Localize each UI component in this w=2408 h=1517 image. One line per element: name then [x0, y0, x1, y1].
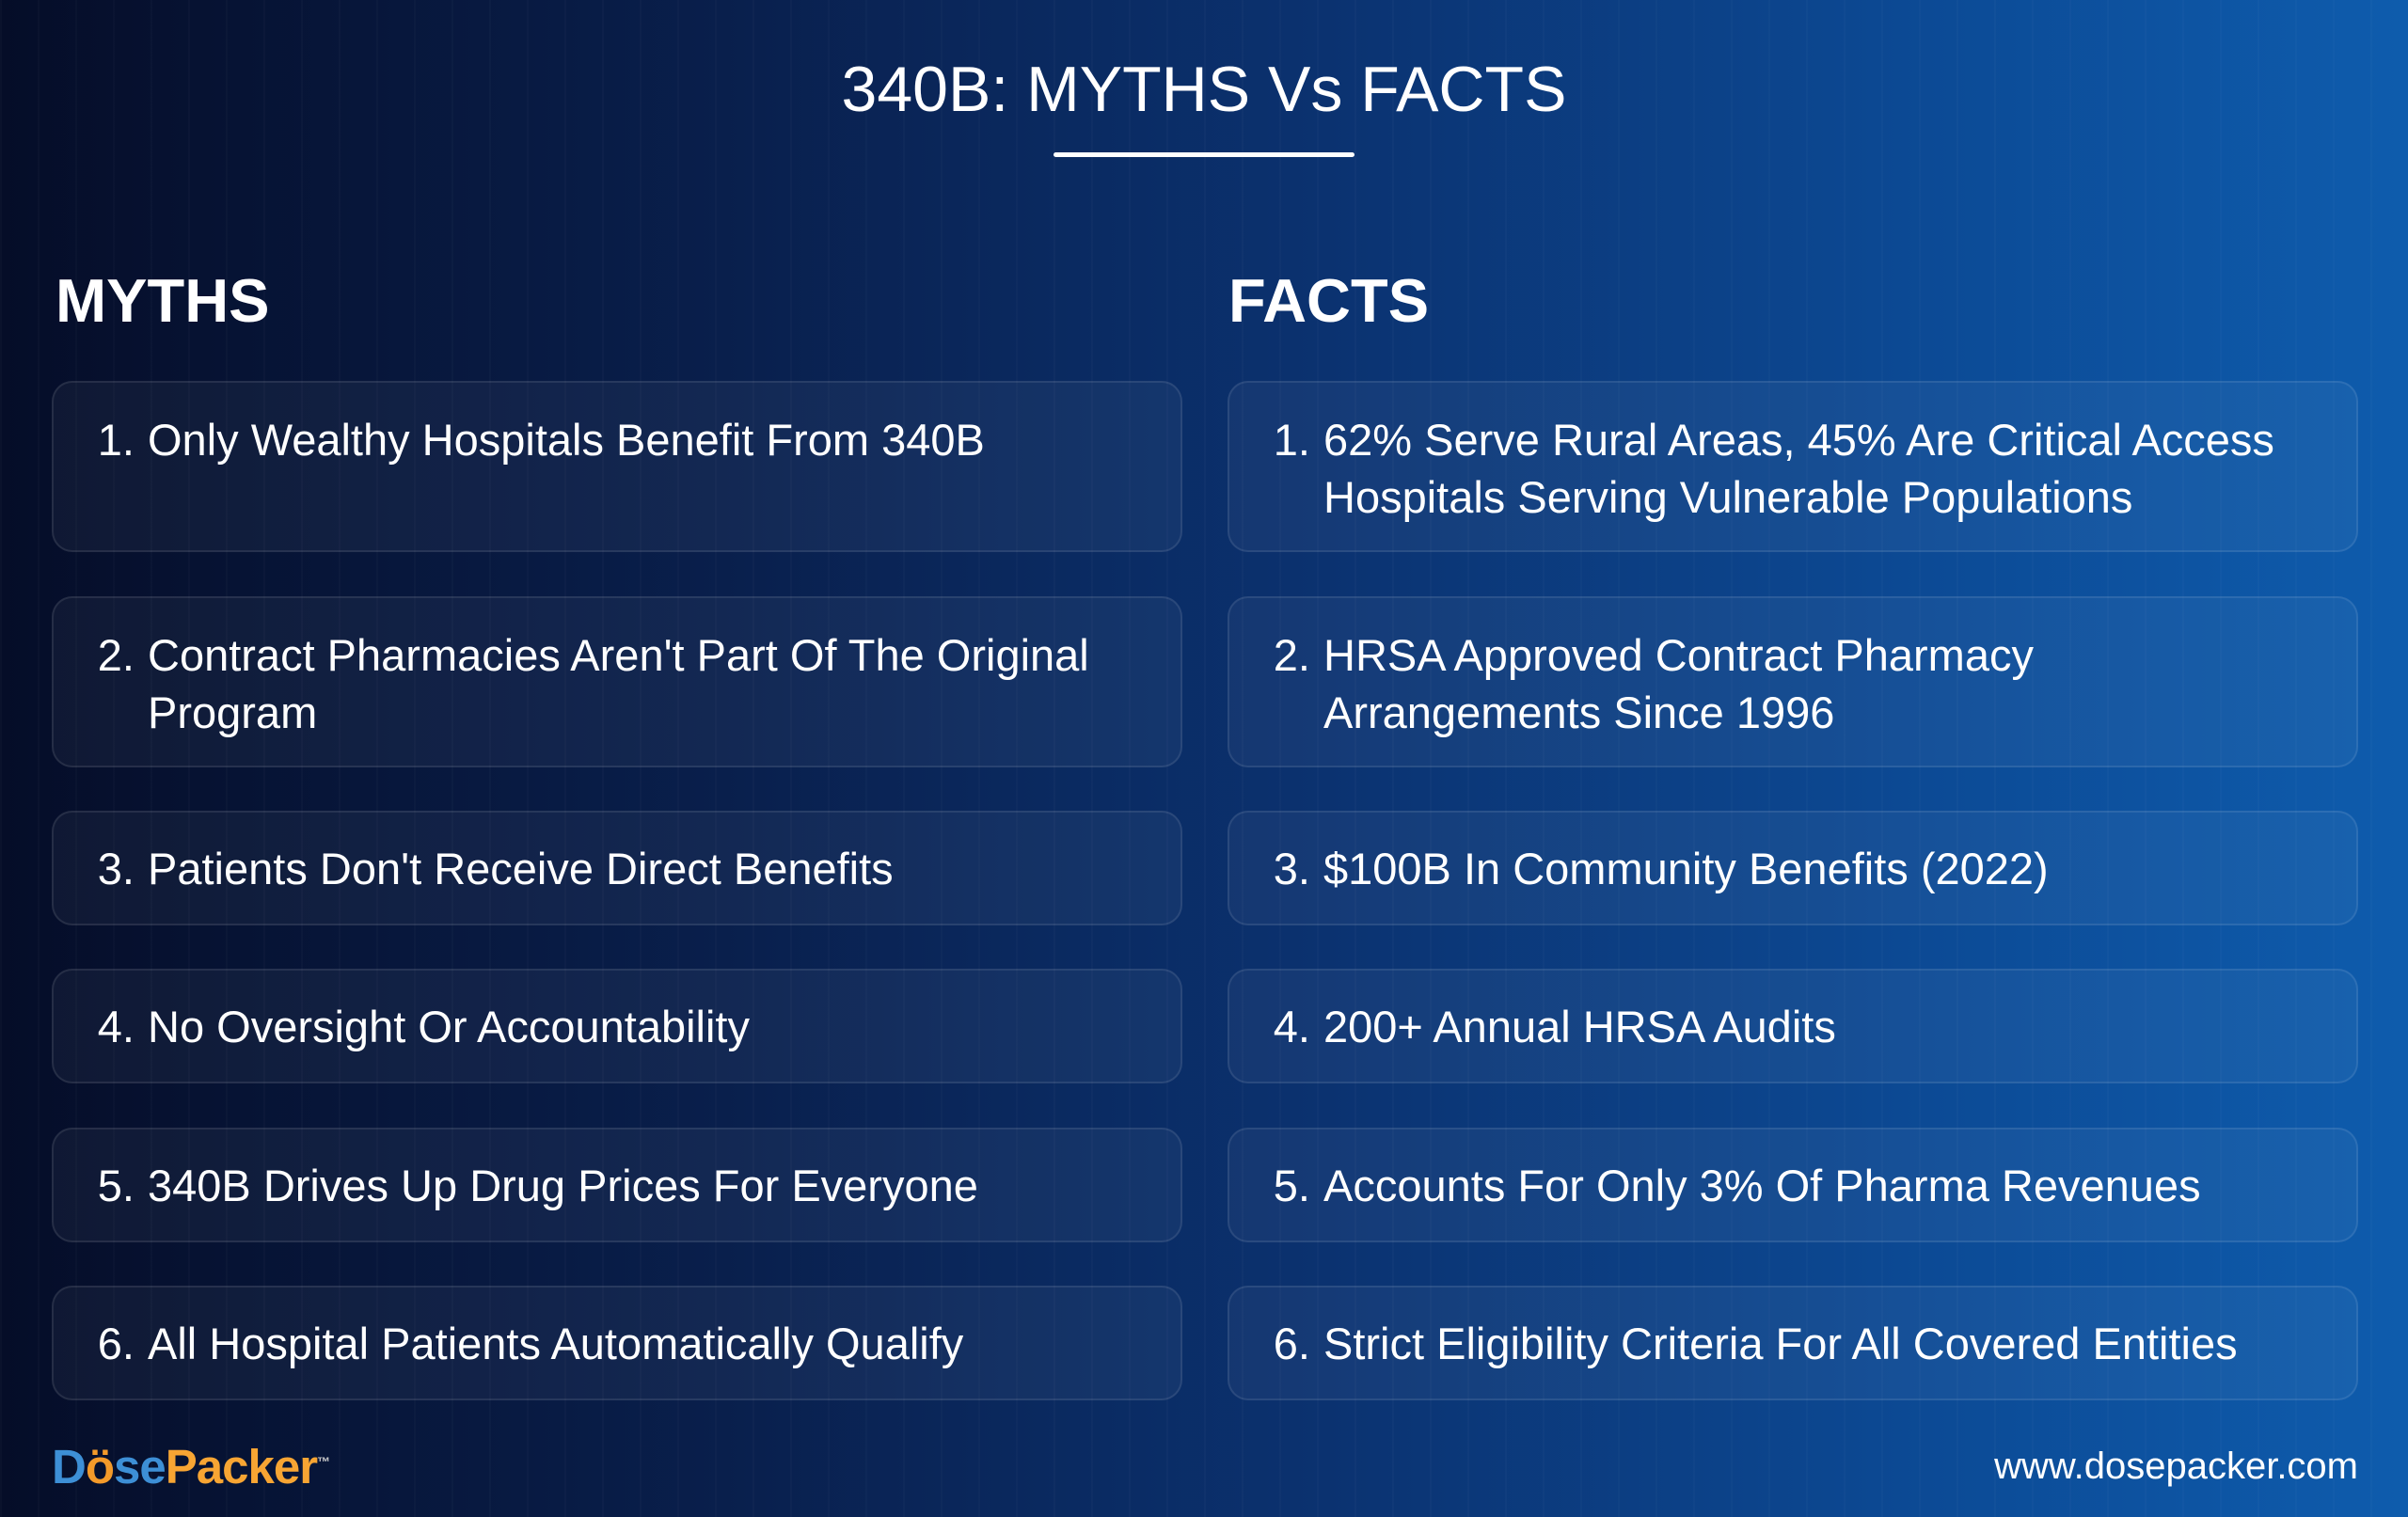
myth card 2: 2. — [98, 630, 135, 680]
heading: facts: FACTS — [1228, 266, 1429, 335]
logo: DösePacker™ — [52, 1440, 329, 1493]
myth card 1: 1. — [98, 415, 135, 465]
fact card 3 — [1228, 811, 2358, 925]
myth card 5: 5. — [98, 1161, 135, 1209]
fact card 6 — [1228, 1286, 2358, 1400]
myth card 2 — [52, 596, 1182, 767]
fact card 4: 4. — [1274, 1001, 1310, 1051]
myth card 6 — [52, 1286, 1182, 1400]
myth card 3 — [52, 811, 1182, 925]
myth card 6: All Hospital Patients Automatically Qualify — [148, 1319, 963, 1367]
myth card 4: No Oversight Or Accountability — [148, 1001, 750, 1051]
myth card 6: 6. — [98, 1319, 135, 1367]
fact card 1 — [1228, 381, 2358, 552]
fact card 4: 200+ Annual HRSA Audits — [1323, 1001, 1836, 1051]
myth card 5 — [52, 1128, 1182, 1242]
fact card 6: Strict Eligibility Criteria For All Covered Entities — [1323, 1319, 2238, 1367]
myth card 1 — [52, 381, 1182, 552]
fact card 1: 62% Serve Rural Areas, 45% Are Critical Access Hospitals Serving Vulnerable Populations — [1323, 415, 2274, 522]
myth card 3: Patients Don't Receive Direct Benefits — [148, 843, 894, 893]
website url: www.dosepacker.com — [1994, 1446, 2358, 1487]
fact card 6: 6. — [1274, 1319, 1310, 1367]
fact card 3: $100B In Community Benefits (2022) — [1323, 843, 2049, 893]
myth card 2: Contract Pharmacies Aren't Part Of The Original Program — [148, 630, 1089, 737]
fact card 5 — [1228, 1128, 2358, 1242]
myth card 5: 340B Drives Up Drug Prices For Everyone — [148, 1161, 978, 1209]
fact card 5: 5. — [1274, 1161, 1310, 1209]
title: 340B: MYTHS Vs FACTS — [842, 54, 1566, 125]
fact card 3: 3. — [1274, 843, 1310, 893]
fact card 2: 2. — [1274, 630, 1310, 680]
myth card 3: 3. — [98, 843, 135, 893]
heading: myths: MYTHS — [55, 266, 269, 335]
myth card 1: Only Wealthy Hospitals Benefit From 340B — [148, 415, 985, 465]
fact card 1: 1. — [1274, 415, 1310, 465]
myth card 4: 4. — [98, 1001, 135, 1051]
fact card 4 — [1228, 969, 2358, 1083]
fact card 2: Arrangements Since 1996 — [1323, 687, 1834, 737]
fact card 5: Accounts For Only 3% Of Pharma Revenues — [1323, 1161, 2201, 1209]
fact card 2 — [1228, 596, 2358, 767]
fact card 2: HRSA Approved Contract Pharmacy — [1323, 630, 2034, 680]
myth card 4 — [52, 969, 1182, 1083]
